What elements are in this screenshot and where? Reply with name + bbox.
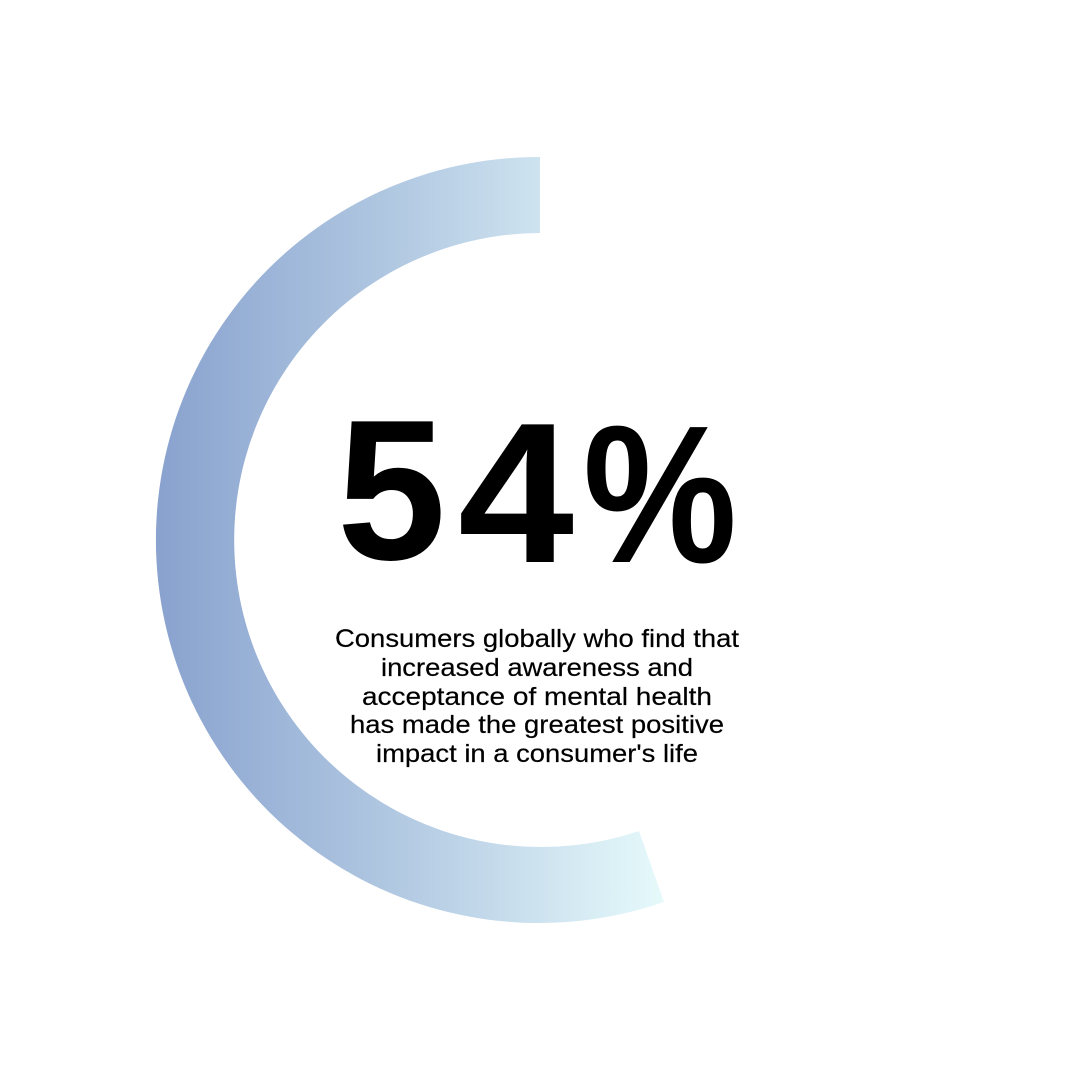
- donut chart: 54% ring: [156, 157, 664, 923]
- description text: acceptance of mental health: [362, 683, 712, 711]
- headline stat: 54%: [337, 379, 737, 605]
- headline stat: 54%: %: [583, 385, 737, 604]
- description text: impact in a consumer's life: [376, 740, 698, 768]
- description text: Consumers globally who find that: [335, 625, 739, 653]
- headline stat: 54%: 4: [458, 382, 574, 605]
- description text: [335, 625, 739, 768]
- description text: increased awareness and: [381, 654, 693, 682]
- description text: has made the greatest positive: [350, 711, 724, 739]
- headline stat: 54%: 5: [337, 379, 446, 602]
